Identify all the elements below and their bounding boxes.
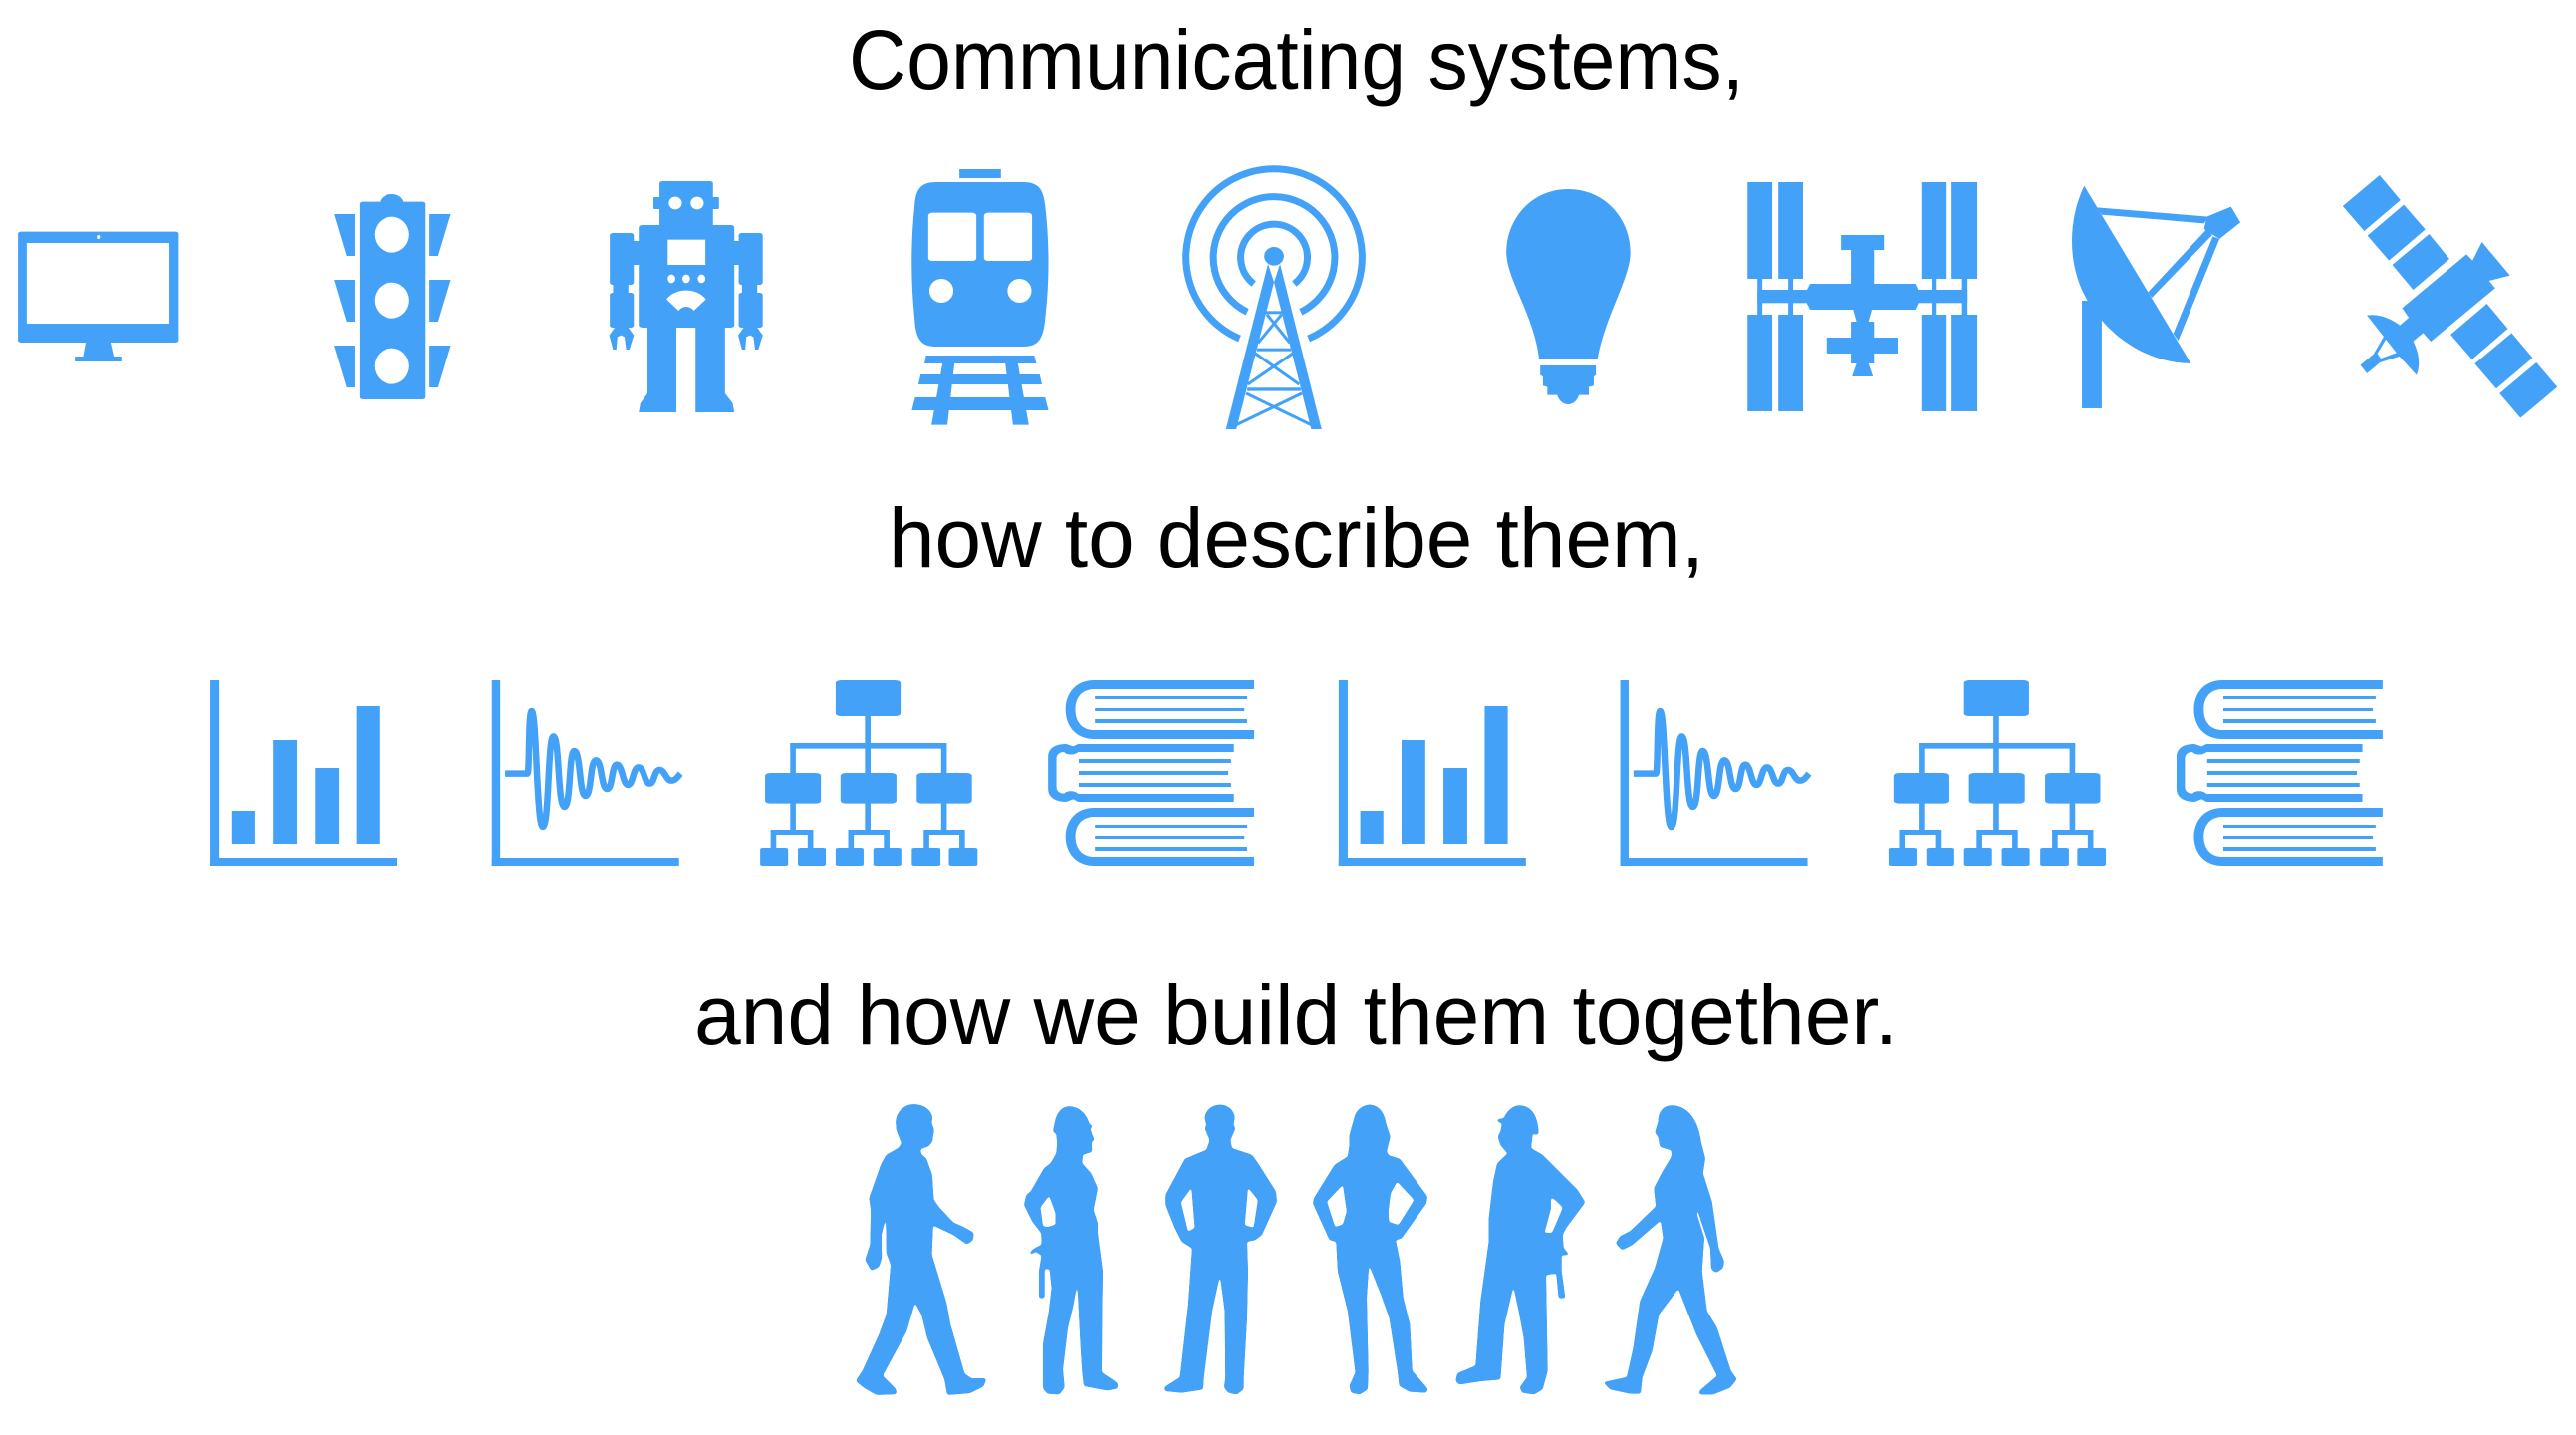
icon: walking woman — [1604, 1106, 1736, 1394]
row: people silhouettes — [857, 1105, 1736, 1394]
heading: how to describe them: how to describe them, — [889, 491, 1704, 585]
icon: train — [911, 169, 1049, 425]
icon: light bulb — [1506, 189, 1631, 404]
icon: stack of books (repeat) — [2177, 680, 2383, 866]
icon: man standing with hands on hips — [1164, 1105, 1277, 1394]
icon: org chart (repeat) — [1889, 680, 2106, 866]
row: system icons — [18, 169, 2557, 429]
icon: stack of books — [1048, 680, 1254, 866]
icon: satellite — [2343, 175, 2557, 418]
icon: man with hard hat and tool belt — [1456, 1106, 1585, 1394]
icon: satellite dish — [2072, 186, 2240, 408]
icon: damped wave chart — [492, 680, 680, 866]
icon: bar chart — [210, 680, 397, 866]
icon: damped wave chart (repeat) — [1621, 680, 1809, 866]
icon: traffic light — [334, 194, 451, 399]
icon: radio tower — [1186, 169, 1362, 429]
heading: communicating systems: Communicating systems, — [849, 13, 1744, 107]
icon: computer monitor — [18, 232, 178, 361]
icon: robot — [610, 181, 763, 412]
row: description icons — [210, 680, 2383, 866]
icon: org chart — [760, 680, 977, 866]
heading: how we build them together: and how we build them together. — [694, 968, 1898, 1062]
icon: space station — [1747, 182, 1977, 411]
icon: bar chart (repeat) — [1339, 680, 1526, 866]
icon: woman standing with hands on hips — [1313, 1105, 1427, 1394]
icon: walking man — [857, 1105, 985, 1394]
icon: woman with hard hat and tool belt — [1024, 1107, 1118, 1394]
